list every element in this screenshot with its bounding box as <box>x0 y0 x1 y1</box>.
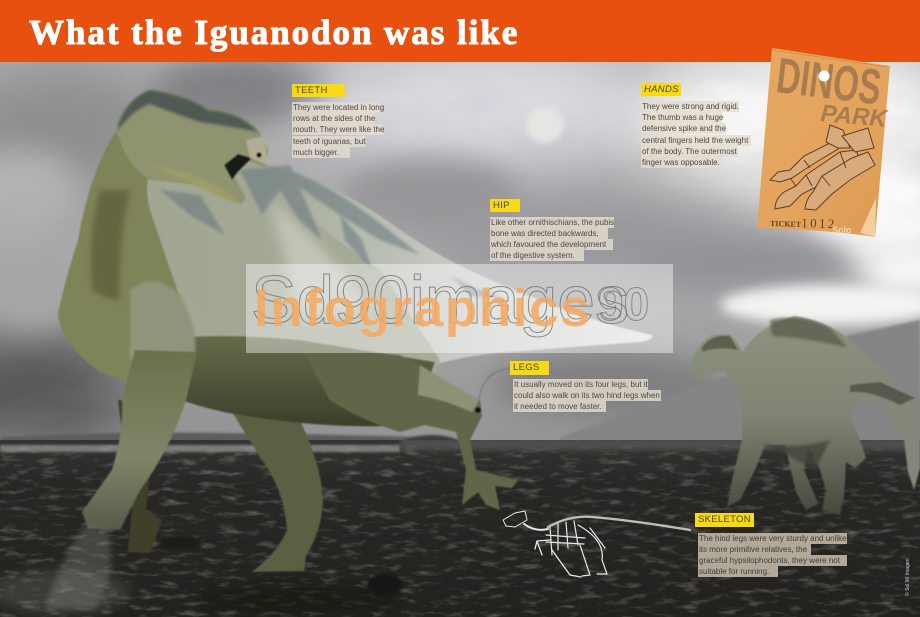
callout: hip: HIP <box>493 200 510 211</box>
callout: hip: bone was directed backwards, <box>491 228 599 238</box>
watermark <box>246 264 673 353</box>
callout: skeleton: suitable for running. <box>699 567 769 576</box>
back stripes <box>160 165 505 298</box>
raised foot pointer <box>475 368 510 413</box>
callout: hands <box>641 83 751 168</box>
iguanodon: third animal <box>838 381 920 490</box>
far hind leg <box>232 412 323 572</box>
callout: teeth: mouth. They were like the <box>293 125 384 134</box>
header band <box>0 0 920 62</box>
teeth pointer <box>256 152 262 158</box>
callout: legs: LEGS <box>513 362 540 373</box>
callout: legs: could also walk on its two hind legs when <box>514 391 660 400</box>
callout: hands: HANDS <box>644 84 679 95</box>
rocky ground <box>0 438 920 617</box>
callout: hands: central fingers held the weight <box>642 136 748 144</box>
callout: teeth: TEETH <box>295 85 328 96</box>
callout: hip: which favoured the development <box>491 240 606 249</box>
callout: legs <box>510 361 661 412</box>
callout: hip: Like other ornithischians, the pubis <box>491 218 614 226</box>
callout: legs: It usually moved on its four legs, but it <box>514 380 648 388</box>
sky background <box>0 40 920 450</box>
ticket hole <box>818 70 830 82</box>
callout: teeth: They were located in long <box>293 103 384 112</box>
skin highlights <box>270 200 370 320</box>
callout: skeleton: SKELETON <box>698 514 751 525</box>
iguanodon: second animal <box>690 316 900 515</box>
distant iguanodon herd <box>690 316 920 515</box>
callout: skeleton: graceful hypsilophodonts, they were not <box>699 556 840 565</box>
callout: hands: finger was opposable. <box>642 158 720 167</box>
callout: hands: They were strong and rigid. <box>642 102 739 111</box>
callout: legs: it needed to move faster. <box>514 402 602 411</box>
callout: teeth: teeth of iguanas, but <box>293 136 366 146</box>
ticket card <box>757 47 890 237</box>
callout: teeth: rows at the sides of the <box>293 114 375 123</box>
head <box>116 90 268 204</box>
skeleton drawing <box>503 511 690 577</box>
callout: skeleton: its more primitive relatives, the <box>699 545 807 554</box>
neck <box>58 128 195 385</box>
ticket number: TICKET1012 <box>770 214 837 231</box>
ticket subtitle: PARK <box>819 100 889 133</box>
ticket title: DINOS <box>774 47 884 115</box>
main iguanodon <box>45 90 652 610</box>
callout: hands: of the body. The outermost <box>642 147 737 156</box>
ticket publisher mark: Solo <box>832 225 852 235</box>
front leg <box>82 350 197 530</box>
hind thigh and raised leg <box>300 345 518 510</box>
callout: hands: defensive spike and the <box>642 124 726 133</box>
callout: skeleton: The hind legs were very sturdy and unlike <box>699 534 847 543</box>
body <box>70 175 440 420</box>
callout: hands: The thumb was a huge <box>642 113 723 122</box>
splash <box>45 525 111 610</box>
callout: hip: of the digestive system. <box>491 251 575 260</box>
callout: teeth: much bigger. <box>293 148 339 157</box>
photo credit: © Sol 90 Images <box>904 558 911 596</box>
tail and back <box>150 163 652 366</box>
icon: hand bones <box>770 125 875 210</box>
callout: teeth <box>292 84 384 158</box>
callout: skeleton <box>695 513 847 577</box>
watermark orange text: Infographics <box>254 279 591 338</box>
far front leg <box>118 400 162 553</box>
title: What the Iguanodon was like <box>29 13 519 52</box>
callout: hip <box>490 199 614 261</box>
